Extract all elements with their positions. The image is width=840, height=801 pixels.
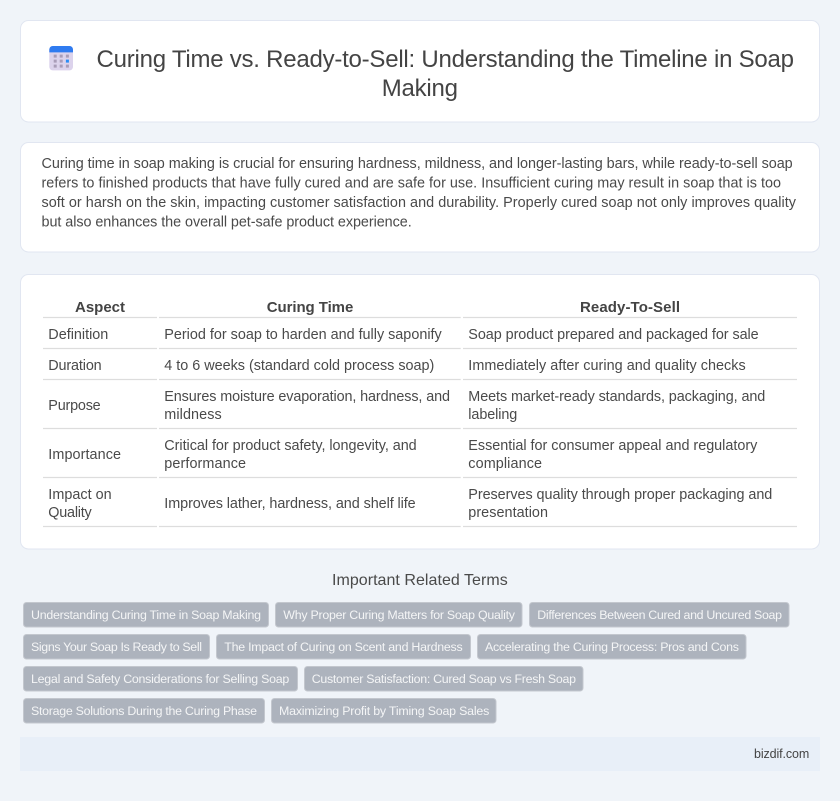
table row: Importance: Importance: [48, 447, 121, 463]
footer: [20, 737, 820, 771]
text block: intro: [42, 156, 797, 230]
table row: Importance: Essential for consumer appeal and regulatory: [468, 438, 758, 454]
tag: Understanding Curing Time in Soap Making: [31, 608, 261, 622]
tag: [216, 634, 470, 659]
table row: Duration: Immediately after curing and quality checks: [468, 358, 746, 374]
table row: Duration: 4 to 6 weeks (standard cold process soap): [164, 358, 434, 374]
tag: [478, 634, 746, 659]
icon: calendar: [49, 46, 73, 70]
table row: Impact on Quality: Preserves quality through proper packaging and: [468, 487, 772, 503]
tag: [24, 698, 264, 723]
tag: Accelerating the Curing Process: Pros and Cons: [485, 640, 739, 654]
table header row: [43, 299, 797, 318]
text block: intro: but also enhances the overall pet-safe product experience.: [42, 214, 412, 230]
tag: [272, 698, 496, 723]
table row: Importance: Critical for product safety, longevity, and: [164, 438, 417, 454]
table row: Duration: Duration: [48, 358, 102, 374]
table header row: Curing Time: [267, 299, 353, 316]
tag: Storage Solutions During the Curing Phase: [31, 704, 257, 718]
title: [96, 46, 794, 102]
table row: Importance: [43, 438, 797, 478]
table row: Impact on Quality: presentation: [468, 505, 548, 521]
tag: Customer Satisfaction: Cured Soap vs Fresh Soap: [312, 672, 576, 686]
table row: Impact on Quality: [43, 487, 797, 526]
tag: [530, 602, 789, 627]
text block: intro: Curing time in soap making is crucial for ensuring hardness, mildness, and longer-lasting bars, while ready-to-sell soap: [42, 156, 793, 172]
table row: Definition: Definition: [48, 327, 108, 343]
tag: [24, 634, 210, 659]
footer: bizdif.com: [754, 747, 809, 761]
table row: Importance: compliance: [468, 456, 542, 472]
table row: Definition: Period for soap to harden and fully saponify: [164, 327, 442, 343]
table row: Impact on Quality: Impact on: [48, 487, 112, 503]
panel: intro paragraph: [20, 142, 820, 252]
tag: Differences Between Cured and Uncured Soap: [537, 608, 782, 622]
table row: Importance: performance: [164, 456, 246, 472]
table row: Purpose: mildness: [164, 407, 222, 423]
table header row: Aspect: [75, 299, 125, 316]
table row: Purpose: Purpose: [48, 398, 101, 414]
table row: Purpose: labeling: [468, 407, 517, 423]
tag: Why Proper Curing Matters for Soap Quality: [283, 608, 516, 622]
tag: Maximizing Profit by Timing Soap Sales: [279, 704, 489, 718]
panel: related term tags: [24, 602, 789, 723]
text block: intro: refers to finished products that have fully cured and are safe for use. Insufficient curing may result in soap that is too: [42, 176, 781, 192]
tag: [24, 666, 298, 691]
table row: Definition: [43, 327, 797, 348]
panel: title header: [20, 20, 820, 122]
table header row: Ready-To-Sell: [580, 299, 680, 316]
table row: Impact on Quality: Quality: [48, 505, 92, 521]
table row: Purpose: Ensures moisture evaporation, hardness, and: [164, 389, 450, 405]
tag: [24, 602, 268, 627]
table row: Duration: [43, 358, 797, 380]
title: Curing Time vs. Ready-to-Sell: Understanding the Timeline in Soap: [96, 46, 794, 73]
tag: Signs Your Soap Is Ready to Sell: [31, 640, 202, 654]
table row: Purpose: [43, 389, 797, 428]
heading: important related terms: Important Related Terms: [332, 572, 508, 589]
tag: The Impact of Curing on Scent and Hardness: [224, 640, 463, 654]
table row: Impact on Quality: Improves lather, hardness, and shelf life: [164, 496, 416, 512]
panel: comparison table: [20, 274, 820, 549]
text block: intro: soft or harsh on the skin, impacting customer satisfaction and durability. Properly cured soap not only improves quality: [42, 195, 797, 211]
tag: [276, 602, 522, 627]
tag: [304, 666, 583, 691]
table row: Purpose: Meets market-ready standards, packaging, and: [468, 389, 765, 405]
title: Making: [382, 75, 458, 102]
tag: Legal and Safety Considerations for Selling Soap: [31, 672, 289, 686]
table row: Definition: Soap product prepared and packaged for sale: [468, 327, 759, 343]
